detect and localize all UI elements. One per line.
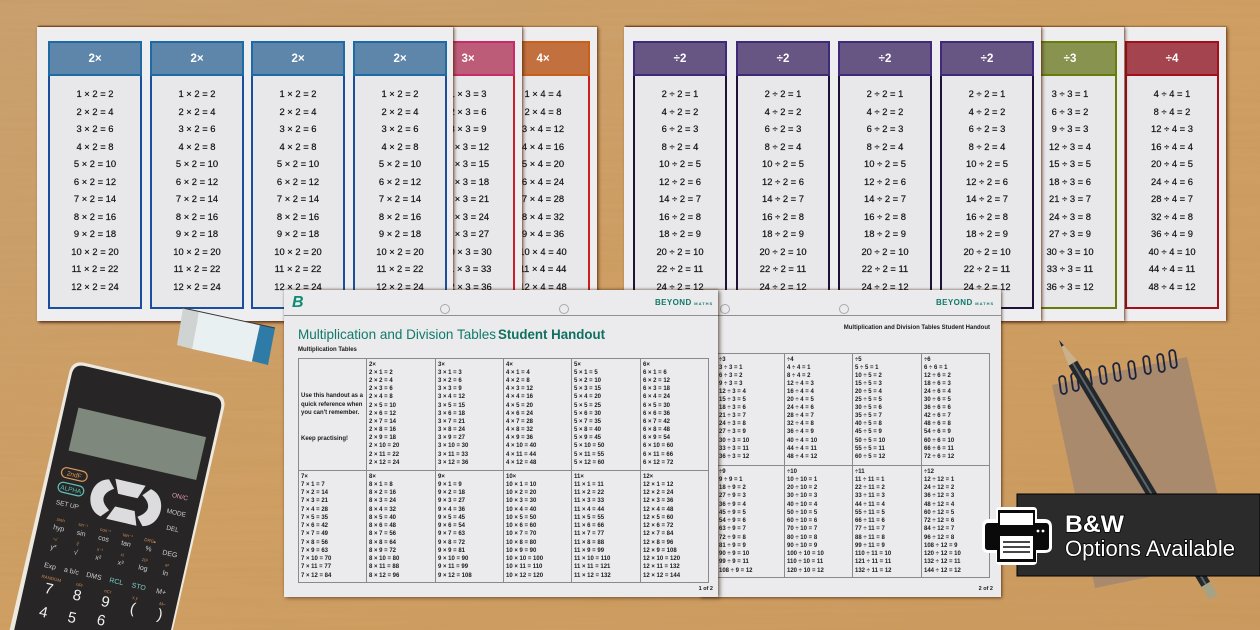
calculator secondary labels: M− (159, 601, 166, 607)
panel: student handout page 1 (multiplication) (284, 290, 718, 597)
calculator secondary labels (41, 516, 180, 607)
card: divide by 2 table, third: ÷2 (879, 53, 891, 65)
table subheading: Multiplication Tables (298, 347, 357, 353)
banner subheading: Options Available (1065, 536, 1235, 561)
icon: eraser (177, 308, 275, 365)
card: 2 times table, third (251, 41, 345, 309)
icon: pencil (1055, 337, 1218, 600)
multiplication table (298, 358, 709, 583)
calculator function oval keys: 2ndF (66, 470, 82, 481)
calculator navigation pad (86, 474, 165, 530)
calculator secondary labels: eˣ (165, 562, 170, 568)
calculator key rows: % (144, 545, 152, 554)
card: 2 times table, second: 2× (190, 53, 204, 65)
handout title: Multiplication and Division Tables (298, 326, 496, 342)
panel: divide by 2 sheet (624, 27, 1041, 321)
card: 2 times table, first: 1 × 2 = 2 2 × 2 = 4 3 × 2 = 6 4 × 2 = 8 5 × 2 = 10 6 × 2 = 12 7 × 2 = 14 8 × 2 = 16 9 × 2 = 18 10 × 2 = 20 11 × 2 = 22 12 × 2 = 24 (71, 88, 119, 292)
card: 2 times table, second (150, 41, 244, 309)
calculator key rows: tan (120, 540, 132, 549)
card: divide by 3 table: 3 ÷ 3 = 1 6 ÷ 3 = 2 9 ÷ 3 = 3 12 ÷ 3 = 4 15 ÷ 3 = 5 18 ÷ 3 = 6 21 ÷ 3 = 7 24 ÷ 3 = 8 27 ÷ 3 = 9 30 ÷ 3 = 10 33 ÷ 3 = 11 36 ÷ 3 = 12 (1046, 88, 1094, 292)
calculator key rows: x² (94, 554, 102, 563)
card: 4 times table: 4× (536, 53, 550, 65)
card: 2 times table, fourth: 1 × 2 = 2 2 × 2 = 4 3 × 2 = 6 4 × 2 = 8 5 × 2 = 10 6 × 2 = 12 7 × 2 = 14 8 × 2 = 16 9 × 2 = 18 10 × 2 = 20 11 × 2 = 22 12 × 2 = 24 (376, 88, 424, 292)
calculator key rows: ( (128, 600, 137, 617)
card: divide by 2 table, fourth (940, 41, 1034, 309)
calculator secondary labels: x,y (132, 595, 139, 601)
multiplication table: 9× 9 × 1 = 9 9 × 2 = 18 9 × 3 = 27 9 × 4 = 36 9 × 5 = 45 9 × 6 = 54 9 × 7 = 63 9 × 8 = 72 9 × 9 = 81 9 × 10 = 90 9 × 11 = 99 9 × 12 = 108 (438, 474, 472, 579)
calculator secondary labels: RANDOM (41, 574, 62, 583)
page number 1 of 2: 1 of 2 (699, 586, 713, 592)
calculator key rows (37, 524, 178, 624)
calculator display (69, 408, 206, 480)
handout title: Student Handout (498, 326, 605, 342)
card: 2 times table, first (48, 41, 142, 309)
card: divide by 2 table, second: 2 ÷ 2 = 1 4 ÷ 2 = 2 6 ÷ 2 = 3 8 ÷ 2 = 4 10 ÷ 2 = 5 12 ÷ 2 = 6 14 ÷ 2 = 7 16 ÷ 2 = 8 18 ÷ 2 = 9 20 ÷ 2 = 10 22 ÷ 2 = 11 24 ÷ 2 = 12 (759, 88, 807, 292)
card: 3 times table: 3× (461, 53, 475, 65)
calculator function oval keys (54, 467, 191, 535)
calculator secondary labels: x⁻¹ (97, 547, 104, 553)
calculator digit 4: 4 (37, 603, 49, 622)
calculator key rows: y˟ (50, 543, 58, 552)
calculator key rows: 8 (71, 586, 83, 605)
calculator key rows: sin (76, 530, 86, 538)
card: divide by 2 table, fourth: 2 ÷ 2 = 1 4 ÷ 2 = 2 6 ÷ 2 = 3 8 ÷ 2 = 4 10 ÷ 2 = 5 12 ÷ 2 = 6 14 ÷ 2 = 7 16 ÷ 2 = 8 18 ÷ 2 = 9 20 ÷ 2 = 10 22 ÷ 2 = 11 24 ÷ 2 = 12 (963, 88, 1011, 292)
card: 2 times table, fourth: 2× (393, 53, 407, 65)
card: divide by 2 table, first (633, 41, 727, 309)
calculator key rows: x³ (117, 560, 125, 568)
multiplication table: 10× 10 × 1 = 10 10 × 2 = 20 10 × 3 = 30 10 × 4 = 40 10 × 5 = 50 10 × 6 = 60 10 × 7 = 70 10 × 8 = 80 10 × 9 = 90 10 × 10 = 100 10 × 11 = 110 10 × 12 = 120 (506, 474, 543, 579)
icon: spiral notebook (1052, 350, 1232, 588)
division table: ÷9 9 ÷ 9 = 1 18 ÷ 9 = 2 27 ÷ 9 = 3 36 ÷ 9 = 4 45 ÷ 9 = 5 54 ÷ 9 = 6 63 ÷ 9 = 7 72 ÷ 9 = 8 81 ÷ 9 = 9 90 ÷ 9 = 10 99 ÷ 9 = 11 108 ÷ 9 = 12 (719, 469, 752, 574)
calculator key rows: ) (156, 606, 164, 624)
calculator function oval keys: SET UP (55, 499, 79, 511)
division table: ÷11 11 ÷ 11 = 1 22 ÷ 11 = 2 33 ÷ 11 = 3 44 ÷ 11 = 4 55 ÷ 11 = 5 66 ÷ 11 = 6 77 ÷ 11 = 7 88 ÷ 11 = 8 99 ÷ 11 = 9 110 ÷ 11 = 10 121 ÷ 11 = 11 132 ÷ 11 = 12 (855, 469, 892, 574)
card: divide by 2 table, third (838, 41, 932, 309)
multiplication table: 3× 3 × 1 = 3 3 × 2 = 6 3 × 3 = 9 3 × 4 = 12 3 × 5 = 15 3 × 6 = 18 3 × 7 = 21 3 × 8 = 24 3 × 9 = 27 3 × 10 = 30 3 × 11 = 33 3 × 12 = 36 (438, 362, 468, 466)
brand: Beyond Maths, page 1: BEYOND MATHS (655, 298, 713, 307)
calculator secondary labels: ∛ (76, 541, 81, 548)
division table: ÷12 12 ÷ 12 = 1 24 ÷ 12 = 2 36 ÷ 12 = 3 48 ÷ 12 = 4 60 ÷ 12 = 5 72 ÷ 12 = 6 84 ÷ 12 = 7 96 ÷ 12 = 8 108 ÷ 12 = 9 120 ÷ 12 = 10 132 ÷ 12 = 11 144 ÷ 12 = 12 (924, 469, 961, 574)
calculator secondary labels: ⁿ√ (53, 536, 58, 542)
card: 2 times table, third: 2× (291, 53, 305, 65)
calculator function oval keys: ALPHA (60, 484, 83, 496)
brand: Beyond Maths, page 2: BEYOND MATHS (936, 298, 994, 307)
card: divide by 4 table: 4 ÷ 4 = 1 8 ÷ 4 = 2 12 ÷ 4 = 3 16 ÷ 4 = 4 20 ÷ 4 = 5 24 ÷ 4 = 6 28 ÷ 4 = 7 32 ÷ 4 = 8 36 ÷ 4 = 9 40 ÷ 4 = 10 44 ÷ 4 = 11 48 ÷ 4 = 12 (1148, 88, 1196, 292)
multiplication table: 6× 6 × 1 = 6 6 × 2 = 12 6 × 3 = 18 6 × 4 = 24 6 × 5 = 30 6 × 6 = 36 6 × 7 = 42 6 × 8 = 48 6 × 9 = 54 6 × 10 = 60 6 × 11 = 66 6 × 12 = 72 (643, 362, 673, 466)
multiplication table: 8× 8 × 1 = 8 8 × 2 = 16 8 × 3 = 24 8 × 4 = 32 8 × 5 = 40 8 × 6 = 48 8 × 7 = 56 8 × 8 = 64 8 × 9 = 72 8 × 10 = 80 8 × 11 = 88 8 × 12 = 96 (369, 474, 399, 579)
panel: student handout page 2 (division) (700, 290, 1001, 597)
card: 2 times table, fourth (353, 41, 447, 309)
calculator key rows: 7 (43, 580, 55, 598)
card: 4 times table: 1 × 4 = 4 2 × 4 = 8 3 × 4 = 12 4 × 4 = 16 5 × 4 = 20 6 × 4 = 24 7 × 4 = 28 8 × 4 = 32 9 × 4 = 36 10 × 4 = 40 11 × 4 = 44 12 × 4 = 48 (519, 88, 567, 292)
icon: Beyond logo: B (292, 294, 304, 311)
multiplication table: 7× 7 × 1 = 7 7 × 2 = 14 7 × 3 = 21 7 × 4 = 28 7 × 5 = 35 7 × 6 = 42 7 × 7 = 49 7 × 8 = 56 7 × 9 = 63 7 × 10 = 70 7 × 11 = 77 7 × 12 = 84 (301, 474, 331, 579)
card: divide by 3 table (1023, 41, 1117, 309)
card: 4 times table (496, 41, 590, 309)
calculator key rows: DMS (85, 572, 102, 582)
calculator secondary labels: nCr (104, 588, 112, 595)
panel: divide by 3 sheet (624, 27, 1124, 321)
card: divide by 2 table, second (736, 41, 830, 309)
card: 2 times table, third: 1 × 2 = 2 2 × 2 = 4 3 × 2 = 6 4 × 2 = 8 5 × 2 = 10 6 × 2 = 12 7 × 2 = 14 8 × 2 = 16 9 × 2 = 18 10 × 2 = 20 11 × 2 = 22 12 × 2 = 24 (274, 88, 322, 292)
calculator function oval keys: DEL (166, 525, 180, 534)
panel: 3x table sheet (37, 27, 522, 321)
multiplication table: 11× 11 × 1 = 11 11 × 2 = 22 11 × 3 = 33 11 × 4 = 44 11 × 5 = 55 11 × 6 = 66 11 × 7 = 77 11 × 8 = 88 11 × 9 = 99 11 × 10 = 110 11 × 11 = 121 11 × 12 = 132 (574, 474, 611, 579)
calculator secondary labels: 10ˣ (141, 557, 149, 563)
calculator secondary labels: cos⁻¹ (100, 527, 112, 534)
panel: divide by 4 sheet (624, 27, 1226, 321)
note: usage text: Use this handout as a quick reference when you can't remember. Keep practising! (301, 393, 363, 442)
card: 2 times table, first: 2× (88, 53, 102, 65)
calculator function oval keys: MODE (166, 508, 187, 519)
calculator secondary labels: x! (120, 552, 125, 558)
calculator secondary labels: sin⁻¹ (78, 522, 89, 529)
panel: 2x table sheet (37, 27, 453, 321)
multiplication table: 12× 12 × 1 = 12 12 × 2 = 24 12 × 3 = 36 12 × 4 = 48 12 × 5 = 60 12 × 6 = 72 12 × 7 = 84 12 × 8 = 96 12 × 9 = 108 12 × 10 = 120 12 × 11 = 132 12 × 12 = 144 (643, 474, 680, 579)
panel: 4x table sheet (37, 27, 597, 321)
banner heading: B&W (1065, 511, 1124, 538)
calculator key rows: 9 (99, 593, 111, 611)
calculator secondary labels: sinh (56, 517, 66, 524)
calculator key rows: STO (131, 582, 147, 592)
calculator secondary labels: DRG▸ (144, 537, 158, 545)
banner background (1017, 494, 1260, 576)
multiplication table: 2× 2 × 1 = 2 2 × 2 = 4 2 × 3 = 6 2 × 4 = 8 2 × 5 = 10 2 × 6 = 12 2 × 7 = 14 2 × 8 = 16 2 × 9 = 18 2 × 10 = 20 2 × 11 = 22 2 × 12 = 24 (369, 362, 399, 466)
calculator key rows: log (138, 564, 148, 573)
handout title (298, 326, 605, 342)
calculator key rows: Exp (43, 562, 57, 572)
note: usage text (298, 358, 367, 471)
card: divide by 2 table, first: 2 ÷ 2 = 1 4 ÷ 2 = 2 6 ÷ 2 = 3 8 ÷ 2 = 4 10 ÷ 2 = 5 12 ÷ 2 = 6 14 ÷ 2 = 7 16 ÷ 2 = 8 18 ÷ 2 = 9 20 ÷ 2 = 10 22 ÷ 2 = 11 24 ÷ 2 = 12 (656, 88, 704, 292)
calculator key rows: hyp (52, 524, 65, 534)
card: divide by 2 table, first: ÷2 (674, 53, 686, 65)
division table (718, 353, 990, 578)
multiplication table: 5× 5 × 1 = 5 5 × 2 = 10 5 × 3 = 15 5 × 4 = 20 5 × 5 = 25 5 × 6 = 30 5 × 7 = 35 5 × 8 = 40 5 × 9 = 45 5 × 10 = 50 5 × 11 = 55 5 × 12 = 60 (574, 362, 604, 466)
calculator secondary labels: nPr (76, 582, 84, 588)
card: divide by 2 table, third: 2 ÷ 2 = 1 4 ÷ 2 = 2 6 ÷ 2 = 3 8 ÷ 2 = 4 10 ÷ 2 = 5 12 ÷ 2 = 6 14 ÷ 2 = 7 16 ÷ 2 = 8 18 ÷ 2 = 9 20 ÷ 2 = 10 22 ÷ 2 = 11 24 ÷ 2 = 12 (861, 88, 909, 292)
calculator secondary labels: tan⁻¹ (122, 532, 134, 539)
card: divide by 3 table: ÷3 (1064, 53, 1076, 65)
card: divide by 4 table: ÷4 (1166, 53, 1178, 65)
card: 3 times table (421, 41, 515, 309)
calculator digit 5: 5 (66, 609, 78, 627)
calculator key rows: cos (97, 535, 110, 544)
card: divide by 4 table (1125, 41, 1219, 309)
division table: ÷4 4 ÷ 4 = 1 8 ÷ 4 = 2 12 ÷ 4 = 3 16 ÷ 4 = 4 20 ÷ 4 = 5 24 ÷ 4 = 6 28 ÷ 4 = 7 32 ÷ 4 = 8 36 ÷ 4 = 9 40 ÷ 4 = 10 44 ÷ 4 = 11 48 ÷ 4 = 12 (787, 357, 817, 460)
card: divide by 2 table, fourth: ÷2 (981, 53, 993, 65)
division table: ÷10 10 ÷ 10 = 1 20 ÷ 10 = 2 30 ÷ 10 = 3 40 ÷ 10 = 4 50 ÷ 10 = 5 60 ÷ 10 = 6 70 ÷ 10 = 7 80 ÷ 10 = 8 90 ÷ 10 = 9 100 ÷ 10 = 10 110 ÷ 10 = 11 120 ÷ 10 = 12 (787, 469, 824, 574)
calculator key rows: ln (162, 570, 169, 578)
calculator key rows: RCL (109, 577, 124, 587)
calculator key rows: DEG (162, 549, 178, 560)
card: divide by 2 table, second: ÷2 (777, 53, 789, 65)
icon: printer (982, 507, 1052, 565)
card: 3 times table: 1 × 3 = 3 2 × 3 = 6 3 × 3 = 9 4 × 3 = 12 5 × 3 = 15 6 × 3 = 18 7 × 3 = 21 8 × 3 = 24 9 × 3 = 27 10 × 3 = 30 11 × 3 = 33 12 × 3 = 36 (444, 88, 492, 292)
page number 2 of 2: 2 of 2 (979, 586, 993, 592)
calculator key rows: √ (73, 548, 79, 557)
calculator function oval keys: ON/C (171, 492, 189, 503)
multiplication table: 4× 4 × 1 = 4 4 × 2 = 8 4 × 3 = 12 4 × 4 = 16 4 × 5 = 20 4 × 6 = 24 4 × 7 = 28 4 × 8 = 32 4 × 9 = 36 4 × 10 = 40 4 × 11 = 44 4 × 12 = 48 (506, 362, 536, 466)
calculator digit 6: 6 (95, 612, 107, 630)
calculator key rows: a b/c (63, 567, 80, 577)
notebook spiral rings (1059, 350, 1177, 394)
division table: ÷6 6 ÷ 6 = 1 12 ÷ 6 = 2 18 ÷ 6 = 3 24 ÷ 6 = 4 30 ÷ 6 = 5 36 ÷ 6 = 6 42 ÷ 6 = 7 48 ÷ 6 = 8 54 ÷ 6 = 9 60 ÷ 6 = 10 66 ÷ 6 = 11 72 ÷ 6 = 12 (924, 357, 954, 460)
page 2 title: Multiplication and Division Tables Student Handout (844, 325, 990, 331)
division table: ÷3 3 ÷ 3 = 1 6 ÷ 3 = 2 9 ÷ 3 = 3 12 ÷ 3 = 4 15 ÷ 3 = 5 18 ÷ 3 = 6 21 ÷ 3 = 7 24 ÷ 3 = 8 27 ÷ 3 = 9 30 ÷ 3 = 10 33 ÷ 3 = 11 36 ÷ 3 = 12 (719, 357, 749, 460)
card: 2 times table, second: 1 × 2 = 2 2 × 2 = 4 3 × 2 = 6 4 × 2 = 8 5 × 2 = 10 6 × 2 = 12 7 × 2 = 14 8 × 2 = 16 9 × 2 = 18 10 × 2 = 20 11 × 2 = 22 12 × 2 = 24 (173, 88, 221, 292)
division table: ÷5 5 ÷ 5 = 1 10 ÷ 5 = 2 15 ÷ 5 = 3 20 ÷ 5 = 4 25 ÷ 5 = 5 30 ÷ 5 = 6 35 ÷ 5 = 7 40 ÷ 5 = 8 45 ÷ 5 = 9 50 ÷ 5 = 10 55 ÷ 5 = 11 60 ÷ 5 = 12 (855, 357, 885, 460)
calculator key rows: M+ (155, 588, 167, 597)
icon: calculator (10, 362, 225, 630)
